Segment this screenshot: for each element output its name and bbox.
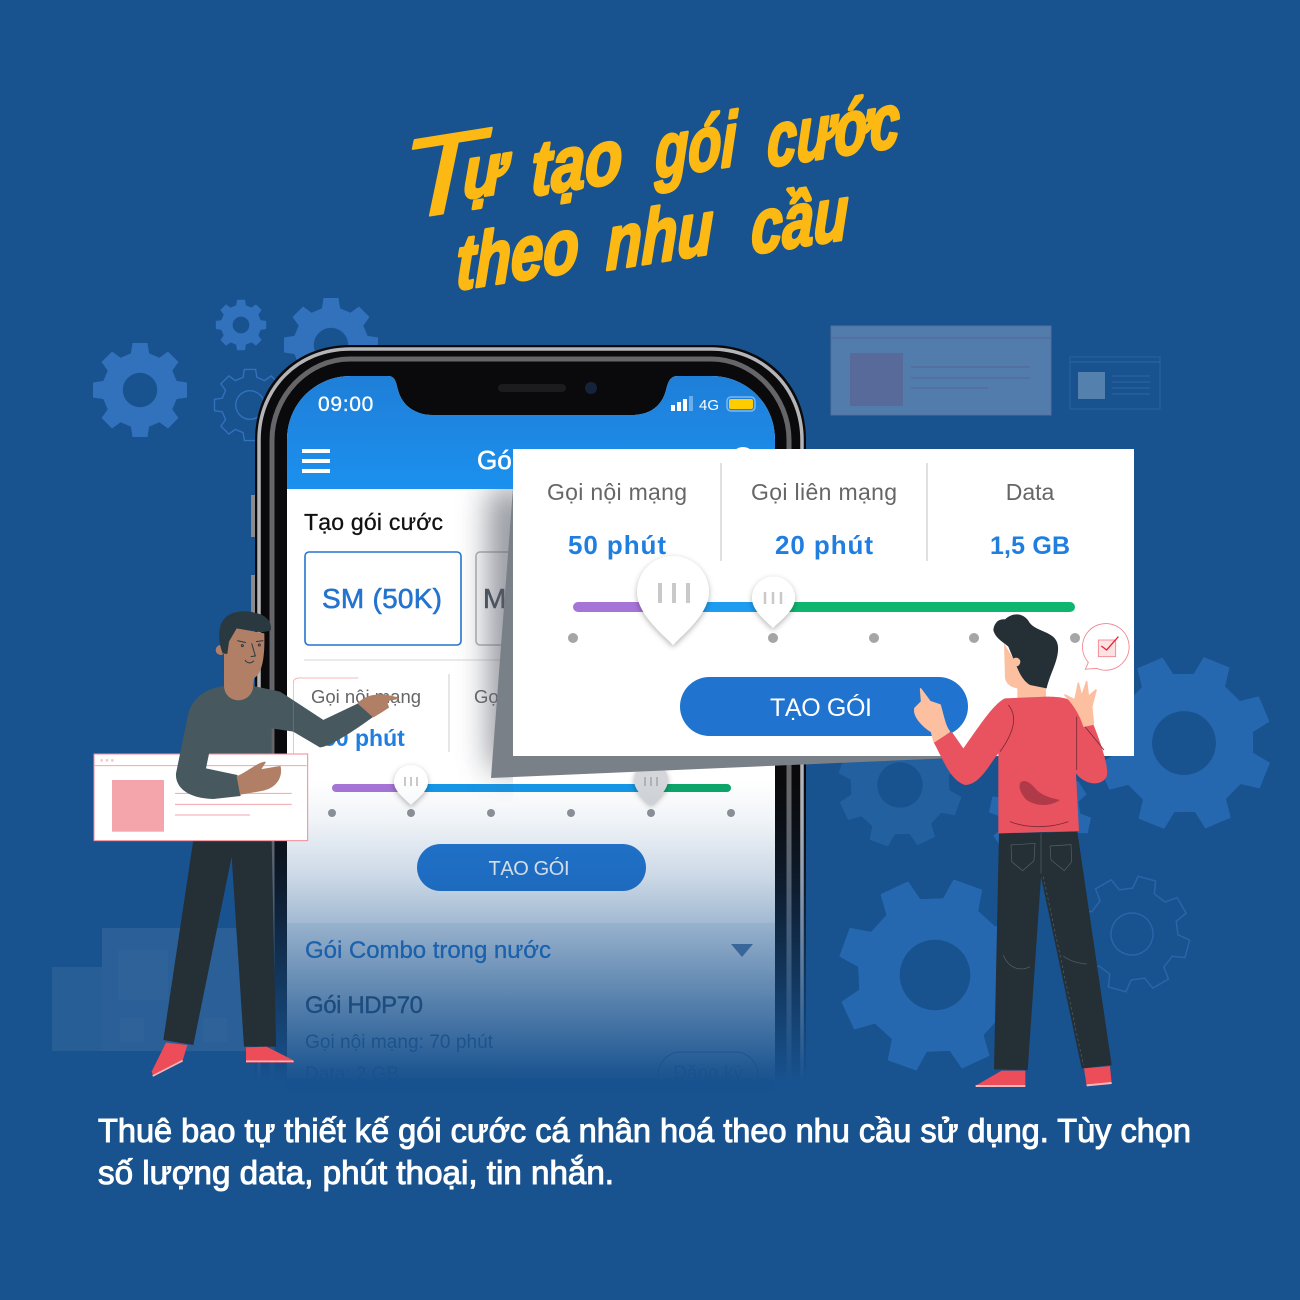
battery: [727, 397, 755, 411]
title word tạo: tạo: [531, 113, 623, 213]
sweater folds: [1000, 705, 1104, 827]
column: external calls: 20 phút: [775, 530, 873, 560]
phone slider: [328, 763, 735, 817]
status bar time: 09:00: [318, 393, 374, 416]
pink outline on screen: [293, 678, 358, 753]
dropdown arrow: [731, 944, 753, 957]
phone create button: TẠO GÓI: [488, 857, 570, 880]
faded window card top right: [831, 326, 1051, 415]
package tab SM: [305, 552, 461, 645]
title letter ự: ự: [463, 126, 512, 215]
package detail data: Data: 2 GB: [305, 1064, 399, 1085]
column: external calls: Gọi liên mạng: [751, 479, 897, 505]
gear: middle: [821, 706, 979, 864]
hands: [915, 682, 1096, 742]
gear: right large: [1071, 630, 1297, 856]
package tab M: M: [483, 583, 506, 614]
neck and head: [1004, 643, 1046, 698]
pants: [994, 832, 1112, 1070]
gear: top small: [216, 300, 266, 350]
sweater: [933, 697, 1107, 833]
gear: behind phone top: [284, 298, 378, 392]
create package button: TẠO GÓI: [770, 693, 872, 722]
signal bars: [671, 396, 693, 411]
slider: [568, 556, 1080, 645]
title word cước: cước: [767, 78, 901, 184]
combo heading: Gói Combo trong nước: [305, 937, 551, 964]
phone screen: [287, 376, 775, 1100]
lower fade overlay: [250, 780, 812, 1100]
section title: Tạo gói cước: [304, 509, 443, 535]
window card held: [94, 754, 308, 841]
register button: Đăng ký: [673, 1063, 743, 1084]
separator: [304, 659, 515, 661]
description line 2: số lượng data, phút thoại, tin nhắn.: [98, 1154, 614, 1191]
column: external calls: [751, 479, 897, 560]
right person: [915, 614, 1129, 1087]
pocket patch: [1020, 781, 1060, 805]
hair: [993, 614, 1058, 688]
description: [98, 1112, 1191, 1191]
notch camera: [498, 382, 597, 394]
faded window card small: [1070, 357, 1160, 409]
hands: [237, 695, 398, 794]
panel shadow on screen: [490, 489, 530, 769]
shoes: [152, 1043, 294, 1077]
arm over card: [176, 713, 241, 799]
title word nhu: nhu: [606, 185, 714, 287]
pants stitching: [1003, 833, 1087, 1065]
zoomed control panel: [513, 449, 1134, 756]
register button: [658, 1052, 758, 1098]
chat bubble with check: [1082, 624, 1129, 670]
phone create button: [417, 844, 646, 891]
package tab M: [476, 552, 536, 645]
hair: [219, 611, 271, 654]
description line 1: Thuê bao tự thiết kế gói cước cá nhân hoá theo nhu cầu sử dụng. Tùy chọn: [98, 1112, 1191, 1149]
package tab SM: SM (50K): [322, 583, 442, 614]
gear: outline left: [214, 369, 286, 441]
network label: 4G: [699, 397, 719, 414]
phone metal frame: [255, 345, 806, 1100]
column: data: 1,5 GB: [990, 532, 1070, 560]
app header: [287, 376, 775, 489]
gear: outline right: [1062, 864, 1202, 1004]
header title: Gó: [477, 445, 512, 475]
panel shadow: [491, 488, 1000, 778]
column: internal calls: Gọi nội mạng: [547, 479, 687, 505]
column: internal calls: [547, 479, 687, 560]
phone: [250, 345, 812, 1100]
shoes: [976, 1066, 1112, 1087]
column: internal calls: 50 phút: [568, 530, 666, 560]
label call external cut off: Gọ: [474, 686, 499, 707]
forearm over screen: [280, 692, 373, 747]
title word gói: gói: [654, 96, 738, 195]
gear: behind right person: [980, 755, 1100, 875]
gear: top left large: [93, 343, 187, 437]
title: [400, 78, 901, 307]
gear: bottom large: [812, 852, 1058, 1098]
title word theo: theo: [456, 202, 580, 307]
phone side buttons: [251, 495, 255, 617]
legs: [163, 840, 276, 1047]
column: data: [990, 479, 1070, 560]
faded building cards bottom left: [52, 928, 287, 1051]
title word cầu: cầu: [751, 170, 849, 271]
label call internal: Gọi nội mạng: [311, 686, 421, 707]
facial features: [237, 641, 263, 663]
infographic canvas: [52, 94, 1270, 1192]
title letter T: T: [400, 103, 494, 244]
neck and face: [224, 628, 264, 700]
column: data: Data: [1006, 479, 1054, 505]
package detail call: Gọi nội mạng: 70 phút: [305, 1032, 494, 1053]
value call internal: 50 phút: [323, 725, 405, 751]
torso: [180, 686, 373, 757]
header info icon: [731, 447, 755, 471]
create package button: [680, 677, 968, 736]
left person: [94, 611, 398, 1077]
package name: Gói HDP70: [305, 992, 423, 1019]
hamburger menu: [302, 451, 330, 471]
